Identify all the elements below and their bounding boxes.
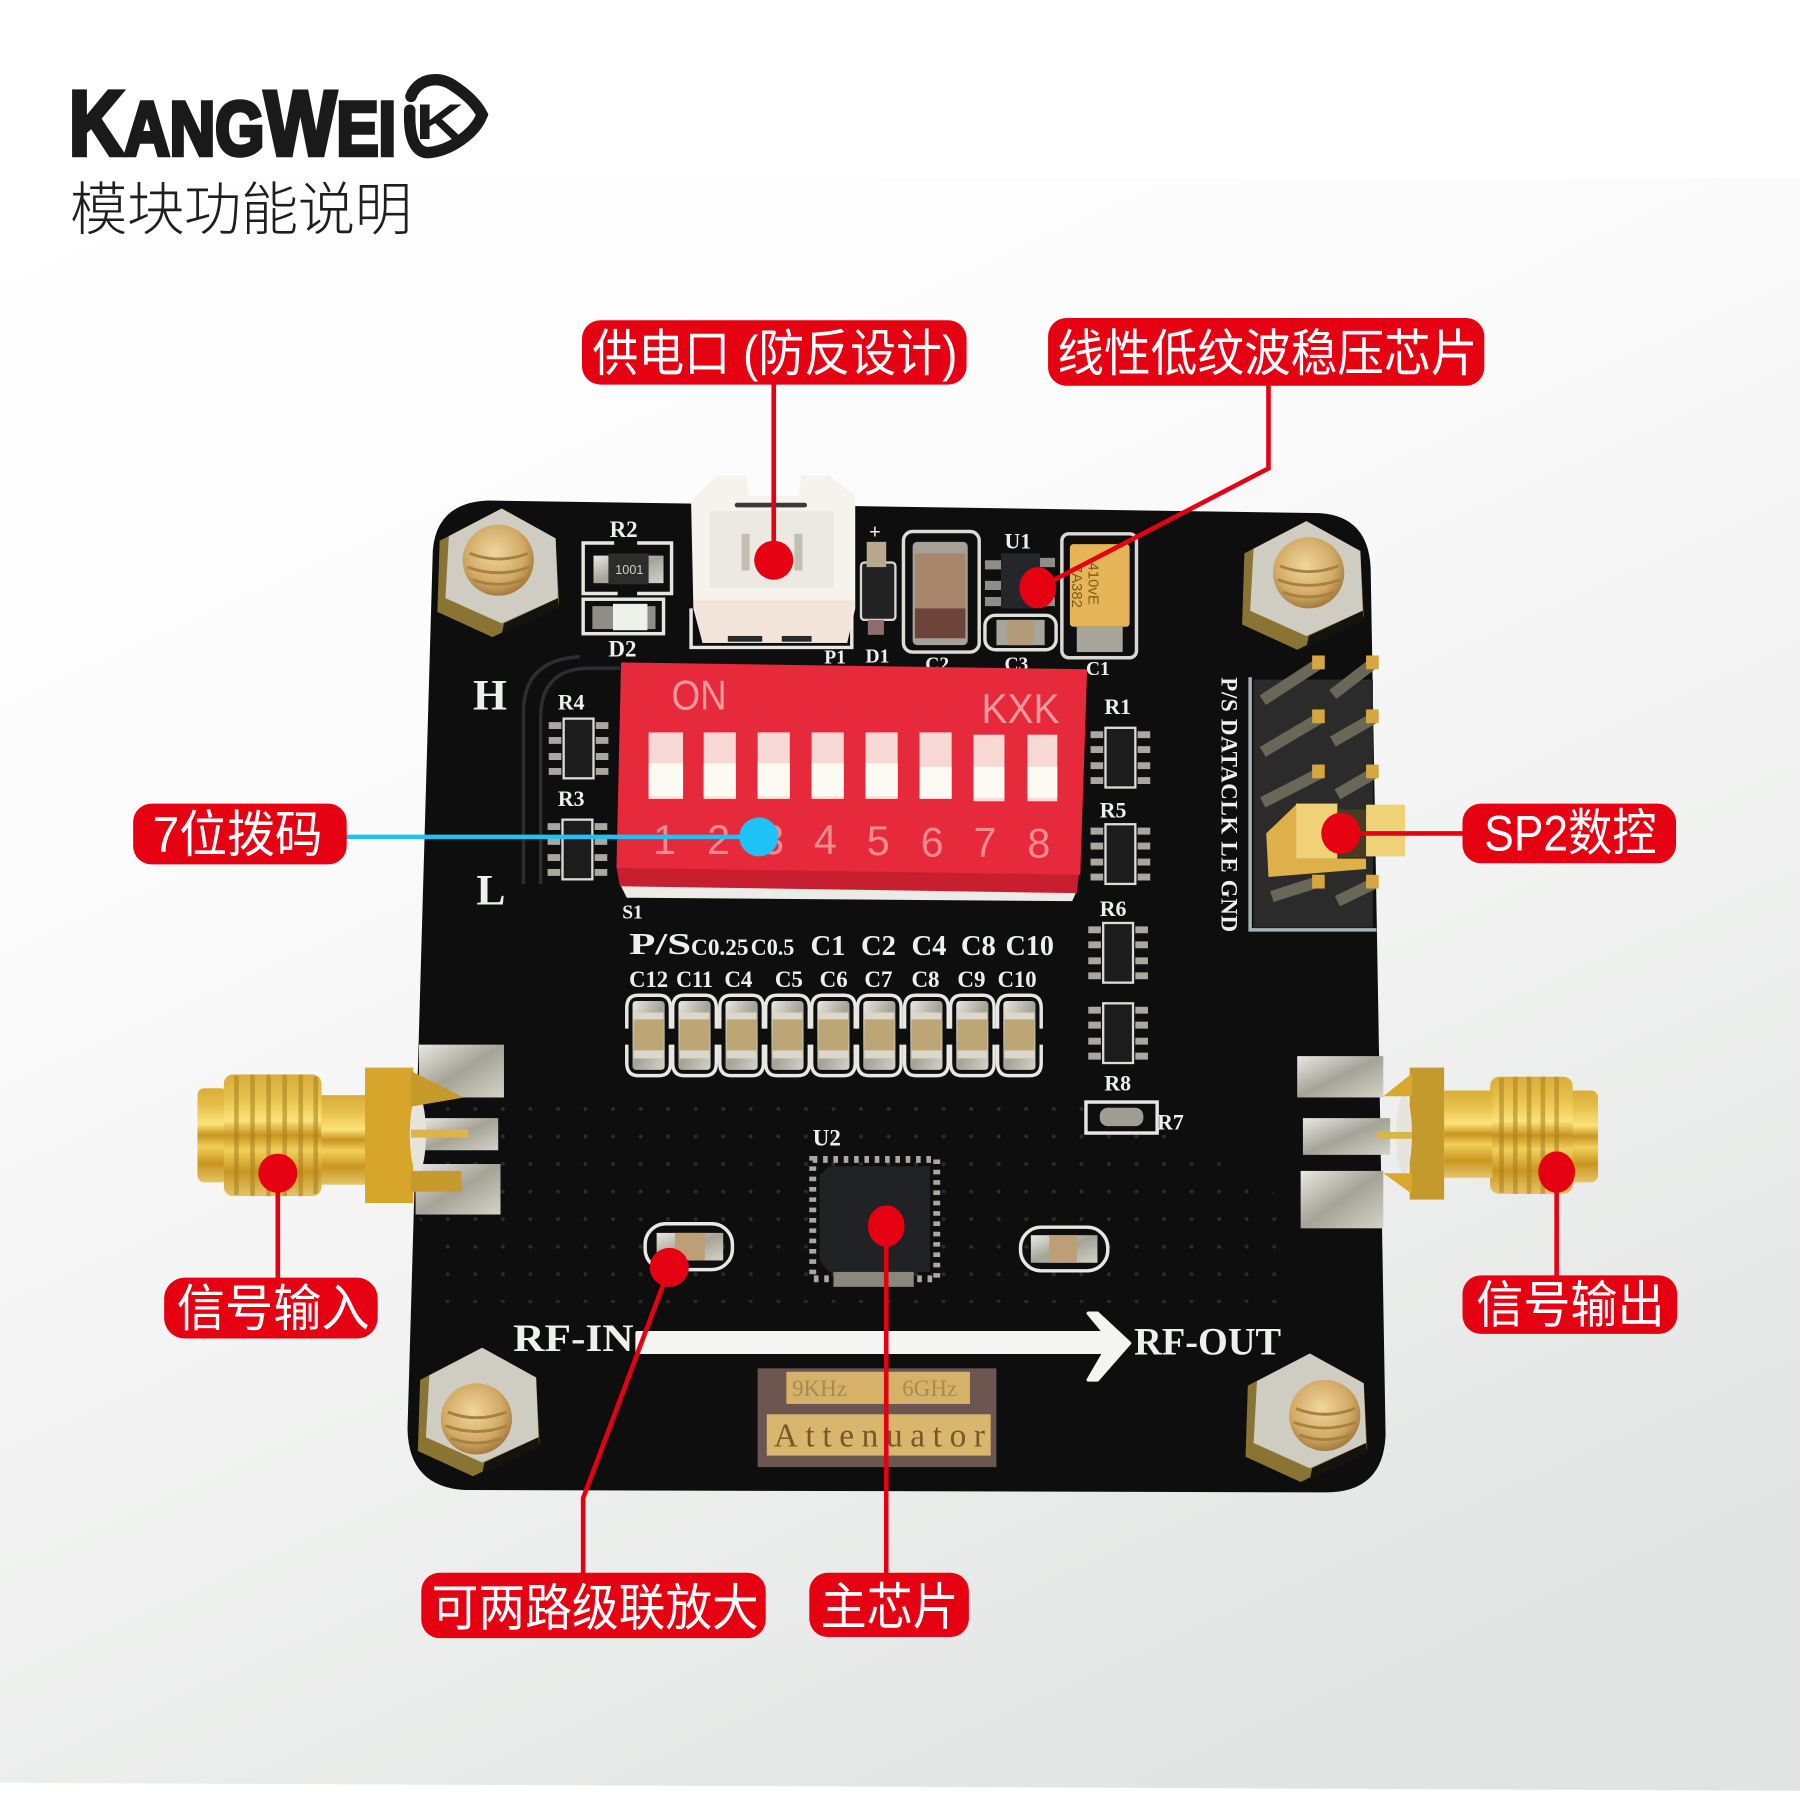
resistor array R5 bbox=[1091, 798, 1150, 884]
jumper slot bbox=[1337, 809, 1366, 858]
LED D2 bbox=[583, 599, 664, 662]
board body bbox=[408, 501, 1386, 1492]
silkscreen bit labels: C2 bbox=[861, 930, 896, 962]
logo: KangWei bbox=[69, 73, 482, 175]
label text: 供电口 (防反设计) bbox=[592, 325, 957, 382]
leader line bbox=[1343, 831, 1465, 835]
resistor array R3 bbox=[548, 787, 607, 879]
leader line bbox=[772, 379, 776, 560]
connector base bbox=[728, 636, 762, 642]
label pill bbox=[133, 804, 347, 864]
silkscreen bit labels: P/S bbox=[629, 926, 691, 961]
white bottom strip bbox=[0, 1783, 1800, 1800]
silk trace outlines bbox=[523, 657, 620, 884]
leader line bbox=[1039, 381, 1268, 588]
silkscreen capacitor labels: C5 bbox=[775, 967, 803, 992]
PCB board bbox=[408, 501, 1386, 1492]
signal flow arrow bbox=[637, 1313, 1130, 1380]
capacitor C3 bbox=[985, 615, 1056, 675]
resistor array R4 bbox=[549, 690, 608, 778]
marker bbox=[739, 817, 778, 856]
resistor array R1 bbox=[1091, 695, 1150, 788]
marker bbox=[1321, 813, 1360, 854]
resistor array R8 bbox=[1088, 1003, 1148, 1096]
D2 body bbox=[592, 606, 655, 629]
C2 outline bbox=[903, 532, 979, 652]
leader line bbox=[276, 1173, 280, 1281]
switch numbers: 1 bbox=[653, 817, 676, 863]
silkscreen bit labels: C0.5 bbox=[751, 935, 794, 960]
logo mark bbox=[410, 80, 482, 153]
callout: signal input bbox=[164, 1154, 378, 1339]
resistor R7 bbox=[1086, 1102, 1184, 1135]
attenuator nameplate bbox=[758, 1368, 996, 1467]
U1 body bbox=[1001, 553, 1040, 608]
mounting nut: top right bbox=[1242, 521, 1364, 650]
label text: 可两路级联放大 bbox=[432, 1580, 759, 1637]
capacitor right of chip bbox=[1021, 1227, 1108, 1271]
attenuator nameplate: 6GHz bbox=[902, 1376, 957, 1401]
SMA pads bbox=[419, 1045, 504, 1097]
RF-IN label: RF-IN bbox=[513, 1317, 634, 1360]
C1 outline bbox=[1062, 534, 1136, 658]
label pill bbox=[421, 1573, 766, 1638]
jumper right top bbox=[1366, 805, 1405, 856]
marker bbox=[868, 1205, 905, 1247]
marker bbox=[1019, 567, 1056, 608]
label pill bbox=[809, 1573, 969, 1637]
SMA flange bbox=[365, 1068, 413, 1203]
silkscreen bit labels: C0.25 bbox=[691, 935, 748, 960]
diode body bbox=[861, 562, 895, 620]
label pill bbox=[1462, 804, 1676, 863]
title: 模块功能说明 bbox=[70, 179, 412, 243]
switch body bbox=[616, 662, 1087, 875]
H label: H bbox=[473, 671, 507, 719]
connector slot bbox=[735, 503, 807, 507]
C1 marking: 410vE bbox=[1084, 562, 1101, 605]
silkscreen capacitor labels: C11 bbox=[676, 967, 713, 992]
switch lower lip bbox=[620, 884, 1077, 901]
switch windows bbox=[649, 732, 1057, 801]
U2 pins bbox=[813, 1159, 937, 1279]
resistor array R6 bbox=[1088, 897, 1148, 983]
C3 body bbox=[996, 620, 1045, 645]
label pill bbox=[1462, 1275, 1677, 1334]
marker bbox=[754, 541, 793, 580]
switch numbers: 3 bbox=[761, 817, 784, 863]
board vias bbox=[413, 1085, 1297, 1303]
jumper bbox=[1266, 804, 1405, 877]
label pill bbox=[164, 1278, 378, 1339]
resistor array R6: R6 bbox=[1100, 897, 1126, 921]
mounting nut: top left bbox=[437, 509, 559, 637]
silkscreen capacitor labels: C4 bbox=[724, 967, 753, 992]
tantalum capacitor C1 bbox=[1062, 534, 1136, 680]
leader line bbox=[1555, 1172, 1559, 1279]
SMA end cap bbox=[197, 1088, 227, 1182]
SMA connector: input bbox=[197, 1045, 504, 1215]
upper gold strip bbox=[786, 1372, 970, 1404]
switch bottom edge bbox=[616, 867, 1079, 893]
header body bbox=[1254, 680, 1373, 928]
DIP switch bbox=[616, 662, 1087, 901]
marker bbox=[1538, 1151, 1575, 1193]
SMA end cap bbox=[1568, 1091, 1598, 1182]
silkscreen bit labels: C4 bbox=[911, 930, 947, 962]
SMA insulator bbox=[410, 1095, 426, 1173]
jumper left top bbox=[1296, 804, 1337, 859]
jumper side face bbox=[1266, 805, 1366, 877]
C1 body bbox=[1070, 544, 1130, 627]
resistor R7: R7 bbox=[1157, 1111, 1184, 1135]
switch numbers: 8 bbox=[1027, 821, 1050, 867]
resistor R2 bbox=[583, 517, 672, 593]
silkscreen capacitor labels: C12 bbox=[629, 967, 668, 992]
silkscreen bit labels: C8 bbox=[961, 930, 996, 962]
regulator chip U1 bbox=[985, 530, 1055, 608]
silkscreen capacitor labels: C6 bbox=[820, 967, 848, 992]
label pill bbox=[582, 320, 967, 385]
silkscreen bit labels: C10 bbox=[1006, 930, 1054, 962]
SMA sleeve bbox=[321, 1095, 367, 1185]
leader line bbox=[583, 1268, 669, 1576]
logo wordmark: KANGWEI bbox=[69, 73, 396, 175]
SMA flange bbox=[1410, 1068, 1444, 1200]
callout: power connector bbox=[582, 320, 967, 580]
connector lower face bbox=[693, 600, 855, 643]
lower gold strip bbox=[767, 1414, 991, 1456]
callout: DIP code bbox=[133, 804, 778, 864]
label text: 信号输入 bbox=[177, 1280, 370, 1337]
SMA connector: output bbox=[1297, 1056, 1598, 1228]
plus mark: + bbox=[869, 521, 881, 543]
SMA pins bbox=[411, 1071, 464, 1192]
D2 label: D2 bbox=[608, 637, 636, 662]
white header band bbox=[0, 0, 1800, 178]
label text: 线性低纹波稳压芯片 bbox=[1057, 325, 1477, 382]
header silkscreen: P/S DATACLK LE GND bbox=[1216, 677, 1241, 932]
resistor array R3: R3 bbox=[558, 787, 585, 811]
diode label: D1 bbox=[866, 646, 889, 667]
switch numbers: 2 bbox=[707, 817, 730, 863]
switch numbers bbox=[653, 817, 1050, 867]
marker bbox=[650, 1248, 689, 1287]
resistor array R8: R8 bbox=[1104, 1072, 1131, 1096]
pin header bbox=[1216, 655, 1379, 932]
label pill bbox=[1048, 318, 1484, 386]
switch numbers: 4 bbox=[814, 817, 837, 863]
U2 bottom pad bbox=[833, 1272, 914, 1287]
L label: L bbox=[476, 867, 505, 915]
SMA thread barrel bbox=[1490, 1077, 1573, 1194]
callout: main chip bbox=[809, 1205, 969, 1637]
C3 outline bbox=[985, 615, 1056, 650]
silkscreen bit labels bbox=[629, 926, 1054, 962]
silkscreen capacitor labels: C7 bbox=[864, 967, 892, 992]
header pin tips bbox=[1312, 655, 1379, 889]
silkscreen capacitor labels: C9 bbox=[957, 967, 985, 992]
connector label: P1 bbox=[824, 648, 846, 669]
C1 label: C1 bbox=[1086, 659, 1110, 680]
D2 outline bbox=[583, 599, 664, 634]
SMA pads bbox=[1297, 1056, 1383, 1097]
U2 body bbox=[820, 1166, 930, 1272]
plate background bbox=[758, 1368, 996, 1467]
SMA sleeve bbox=[1444, 1091, 1492, 1178]
mounting nut: bottom right bbox=[1246, 1353, 1367, 1482]
capacitor row bbox=[627, 995, 1041, 1076]
callout: cascade bbox=[421, 1248, 766, 1638]
label text: SP2数控 bbox=[1484, 805, 1657, 862]
label text: 7位拨码 bbox=[153, 806, 323, 863]
switch numbers: 5 bbox=[867, 818, 890, 864]
connector white outline bbox=[691, 608, 852, 647]
U1 pads bbox=[985, 562, 1055, 602]
resistor array R1: R1 bbox=[1104, 695, 1131, 719]
switch KXK mark: KXK bbox=[982, 686, 1060, 732]
switch ON mark: ON bbox=[672, 672, 727, 718]
connector pins bbox=[742, 534, 750, 571]
callout: SPI control bbox=[1321, 804, 1676, 863]
leader line bbox=[884, 1226, 888, 1576]
RF-OUT label: RF-OUT bbox=[1134, 1321, 1281, 1364]
resistor array R4: R4 bbox=[558, 690, 585, 714]
attenuator text: Attenuator bbox=[774, 1417, 985, 1454]
switch sliders bbox=[649, 763, 1057, 798]
switch numbers: 6 bbox=[921, 819, 944, 865]
silkscreen capacitor labels: C10 bbox=[998, 967, 1037, 992]
connector cavity bbox=[709, 511, 833, 588]
leader line bbox=[344, 835, 758, 839]
U2 label: U2 bbox=[813, 1126, 841, 1151]
R2 outline bbox=[583, 543, 672, 593]
C1 pad bbox=[1077, 627, 1123, 652]
SMA thread barrel bbox=[224, 1074, 321, 1196]
mounting nut: bottom left bbox=[418, 1348, 540, 1476]
connector shell bbox=[691, 475, 855, 643]
frequency text: 9KHz bbox=[792, 1376, 847, 1401]
label text: 主芯片 bbox=[821, 1578, 959, 1635]
main chip U2 bbox=[813, 1126, 937, 1287]
diode pads bbox=[867, 542, 886, 567]
SMA pins bbox=[1383, 1073, 1412, 1194]
diode D1 bbox=[861, 521, 895, 667]
logo mark: K bbox=[416, 93, 464, 150]
header outline bbox=[1250, 677, 1376, 930]
R2 body bbox=[593, 556, 664, 583]
C2 label: C2 bbox=[925, 654, 949, 675]
power connector P1 bbox=[691, 475, 855, 669]
C2 body bbox=[913, 542, 968, 645]
tantalum capacitor C1: 7A382 bbox=[1068, 565, 1085, 608]
SMA insulator bbox=[1396, 1095, 1412, 1173]
silkscreen S1 label: S1 bbox=[622, 902, 643, 923]
callout: signal output bbox=[1462, 1151, 1677, 1334]
R2 label: R2 bbox=[610, 517, 638, 542]
silkscreen bit labels: C1 bbox=[810, 930, 846, 962]
capacitor left of chip bbox=[645, 1224, 732, 1270]
silkscreen capacitor labels: C8 bbox=[911, 967, 940, 992]
resistor array R5: R5 bbox=[1100, 798, 1126, 822]
switch numbers: 7 bbox=[973, 819, 996, 865]
C3 label: C3 bbox=[1004, 654, 1029, 675]
label text: 信号输出 bbox=[1476, 1276, 1665, 1333]
SMA threads bbox=[1502, 1077, 1557, 1194]
SMA threads bbox=[236, 1074, 316, 1196]
silkscreen capacitor labels bbox=[629, 967, 1037, 992]
capacitor C2 bbox=[903, 532, 979, 675]
U1 label: U1 bbox=[1004, 530, 1031, 554]
header pins bbox=[1263, 664, 1373, 901]
callout: LDO chip bbox=[1019, 318, 1484, 608]
marker bbox=[258, 1154, 297, 1193]
resistor R2: 1001 bbox=[615, 563, 643, 577]
